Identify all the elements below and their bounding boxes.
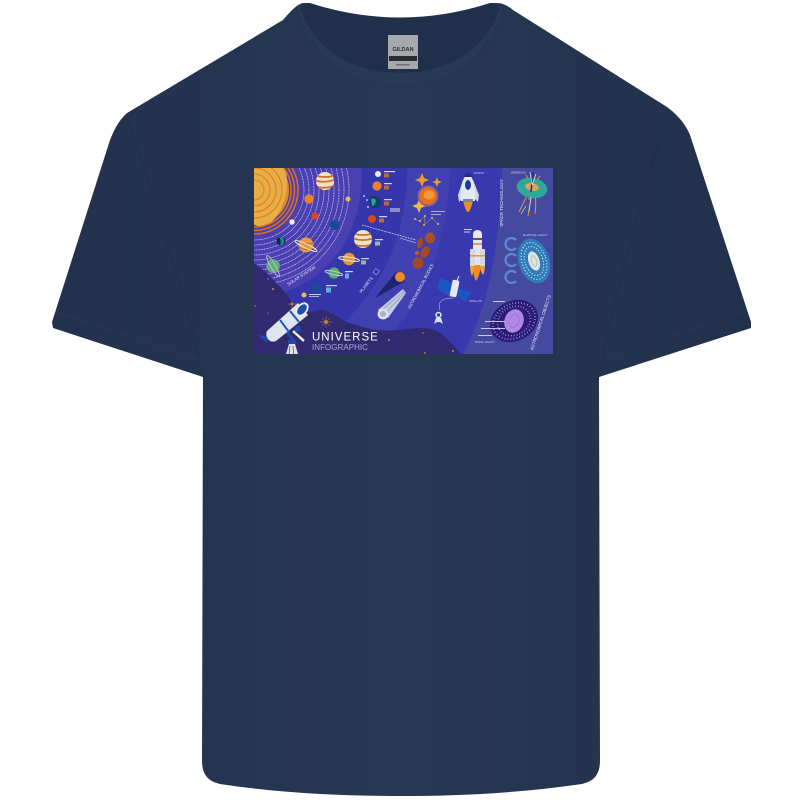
dark night hill [250, 261, 464, 358]
elliptical galaxy blue [512, 234, 556, 288]
spiral galaxy label: SPIRAL GALAXY [475, 341, 495, 344]
collar [297, 0, 503, 86]
spiral galaxy callouts [478, 301, 505, 336]
comet [378, 289, 406, 319]
planet: earth dark [276, 236, 286, 246]
planets column: Saturn [338, 253, 369, 265]
planet: white [289, 219, 295, 225]
wormhole [515, 172, 549, 216]
planets column: Venus [372, 181, 392, 191]
printed universe infographic [254, 168, 553, 354]
planets column: Neptune [312, 283, 337, 293]
planets column: Pluto [302, 292, 321, 298]
planet: blue [330, 220, 340, 230]
planets label [358, 268, 380, 294]
divider line [362, 225, 416, 240]
asteroids [413, 232, 435, 269]
planet: Mars orbit [304, 194, 314, 204]
planets label: PLANETS [358, 276, 374, 294]
title: UNIVERSE: UNIVERSE [312, 332, 379, 344]
star: orange small [432, 177, 442, 187]
star: glowing orange sun [418, 186, 438, 206]
satellite label: SATELLITE [469, 300, 482, 303]
subtitle: INFOGRAPHIC: INFOGRAPHIC [312, 342, 368, 352]
star: yellow [412, 200, 426, 213]
planets column: Earth [363, 195, 400, 212]
planets column: Uranus [325, 267, 353, 279]
asteroid pointer line [400, 238, 416, 243]
astronomical bodies label: ASTRONOMICAL BODIES [407, 263, 435, 310]
solar system label: SOLAR SYSTEM [286, 264, 317, 287]
star: orange large [415, 173, 429, 187]
spiral galaxy purple [483, 292, 545, 350]
galaxy stat rings [506, 238, 516, 283]
rocket label: ROCKET [474, 172, 485, 175]
night stars [254, 278, 454, 354]
neck tag: Gildan: GILDAN [392, 47, 414, 53]
constellation [414, 211, 445, 226]
planet: small yellow [346, 196, 350, 202]
planets column: Jupiter [354, 230, 383, 248]
telescope [258, 300, 311, 354]
wormhole label: WORMHOLE [511, 172, 526, 174]
space technology label: SPACE TECHNOLOGY [499, 179, 504, 227]
planets column: Mercury [375, 171, 395, 178]
rocket large [470, 230, 485, 281]
rocket top [458, 172, 479, 212]
panel: planets band [286, 168, 407, 321]
rocket large label [464, 229, 472, 232]
planet: Saturn orange [294, 238, 318, 253]
satellite [437, 276, 471, 302]
panel: solar system band [254, 168, 362, 292]
planet: Jupiter in orbit [316, 172, 334, 190]
planet: green ringed [266, 255, 280, 277]
neck tag: Gildan [388, 35, 418, 69]
planets column: Mars [368, 215, 387, 223]
solar system orbits [254, 168, 350, 283]
astronomical objects label: ASTRONOMICAL OBJECTS [529, 294, 552, 351]
panel: astronomical objects background [462, 168, 553, 354]
panel: astronomical bodies band [386, 178, 428, 318]
astronaut [434, 298, 453, 324]
elliptical galaxy label: ELLIPTICAL GALAXY [523, 234, 548, 237]
meteor fireball with tail [375, 272, 405, 298]
panel: space technology band [395, 168, 502, 354]
sun [254, 168, 299, 235]
planet: red [311, 212, 319, 220]
